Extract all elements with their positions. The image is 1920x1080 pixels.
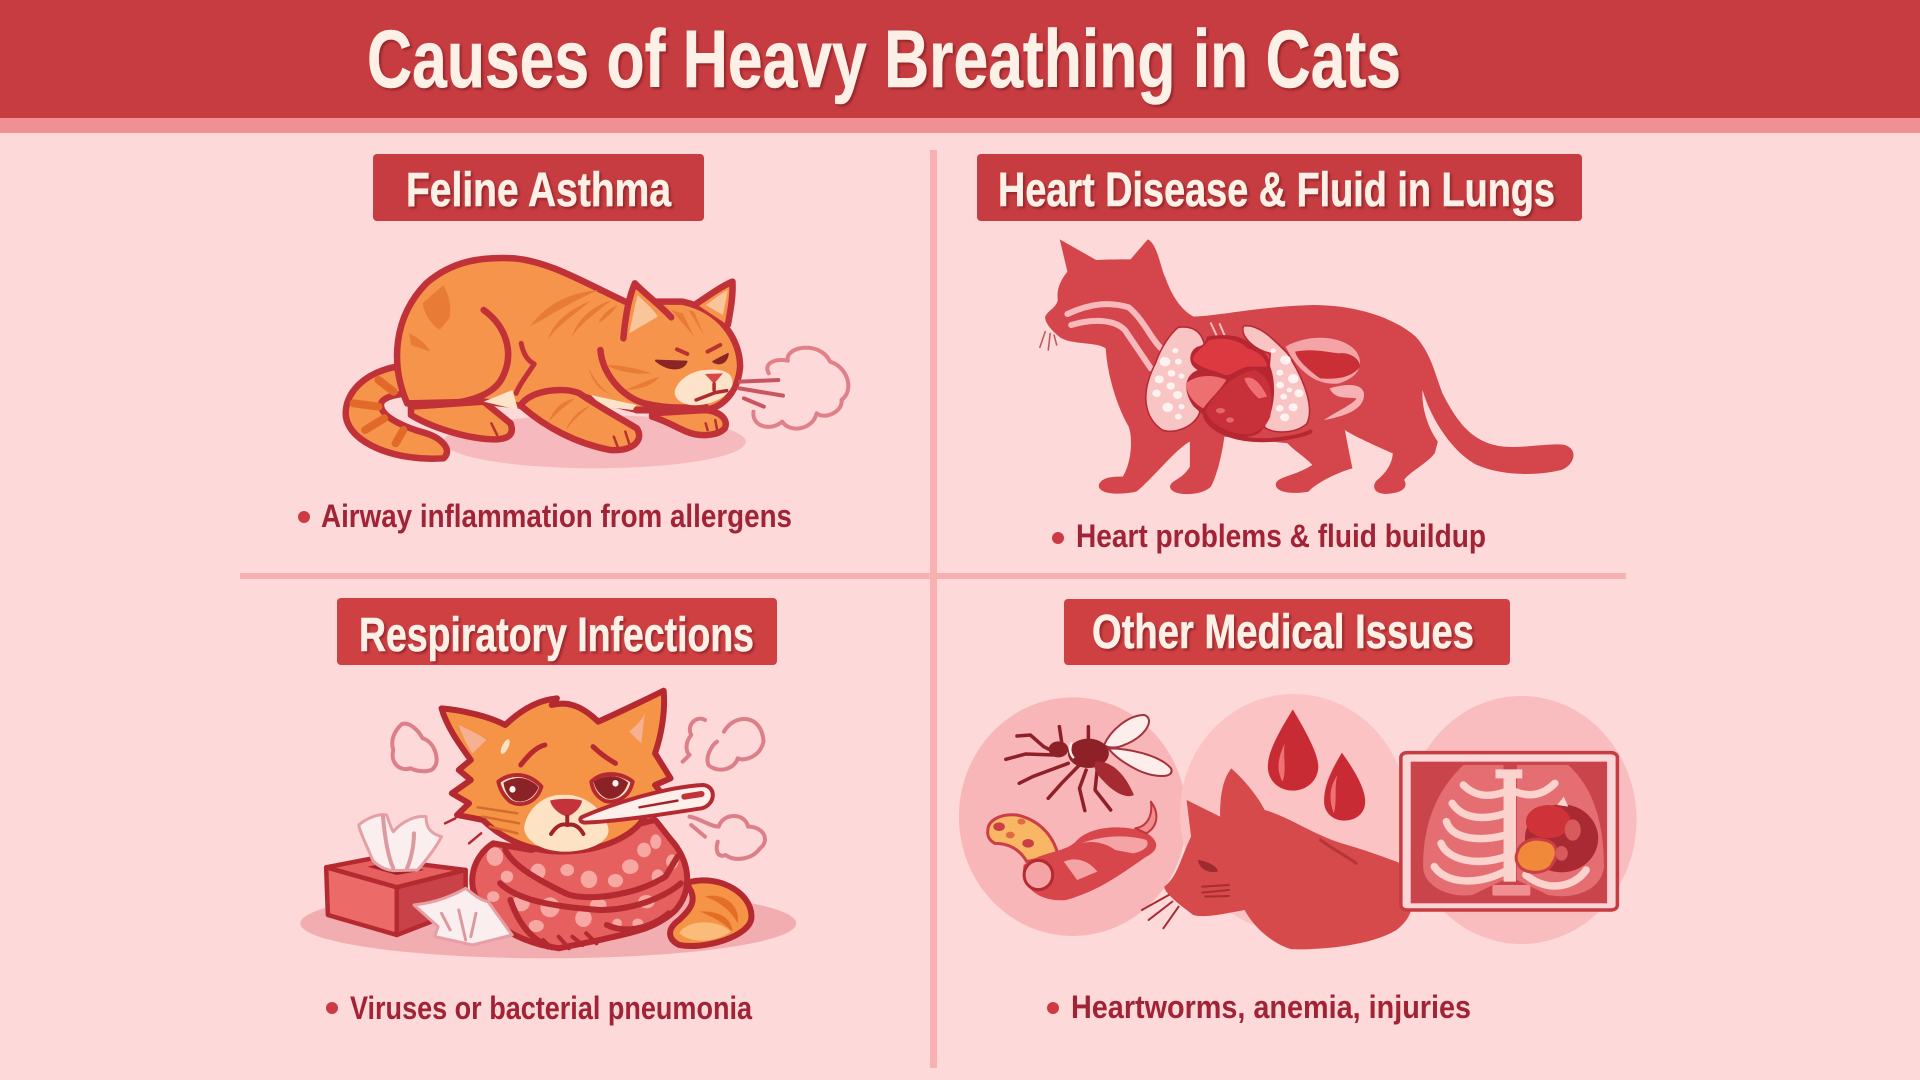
icon: anemic cat bbox=[1142, 768, 1412, 949]
bullet: viruses or bacterial pneumonia: Viruses or bacterial pneumonia bbox=[350, 990, 752, 1026]
heading: respiratory infections: Respiratory Infections bbox=[359, 609, 754, 662]
bullet: heartworms, anemia, injuries: Heartworms, anemia, injuries bbox=[1071, 989, 1471, 1025]
panel: heart disease bbox=[977, 154, 1582, 554]
illustration: sick cat with scarf, thermometer and tissues bbox=[300, 691, 796, 958]
bullet: airway inflammation: Airway inflammation from allergens bbox=[321, 498, 792, 534]
icon: chest x-ray bbox=[1401, 753, 1617, 910]
illustration: crouching orange cat wheezing bbox=[346, 258, 848, 468]
icon: blood drops bbox=[1268, 709, 1365, 821]
panel: respiratory infections bbox=[300, 598, 796, 1026]
heading: other medical issues: Other Medical Issues bbox=[1092, 606, 1474, 659]
panel: feline asthma bbox=[298, 154, 848, 534]
heading: feline asthma: Feline Asthma bbox=[406, 164, 671, 217]
panel: other medical issues bbox=[959, 599, 1637, 1025]
title: Causes of Heavy Breathing in Cats bbox=[367, 14, 1401, 105]
heading: feline asthma bbox=[373, 154, 704, 221]
heading: heart disease: Heart Disease & Fluid in Lungs bbox=[998, 164, 1555, 217]
icon: heartworm bbox=[988, 802, 1156, 900]
illustration: cat anatomy with heart and lungs bbox=[1040, 239, 1573, 494]
bullet: heart problems: Heart problems & fluid buildup bbox=[1076, 518, 1486, 554]
heading: heart disease bbox=[977, 154, 1582, 221]
heading: respiratory infections bbox=[337, 598, 777, 665]
header banner bbox=[0, 0, 1920, 133]
icon: mosquito bbox=[1006, 715, 1172, 811]
illustration: heartworms, anemia and chest injury bbox=[959, 694, 1637, 949]
heading: other medical issues bbox=[1064, 599, 1510, 665]
